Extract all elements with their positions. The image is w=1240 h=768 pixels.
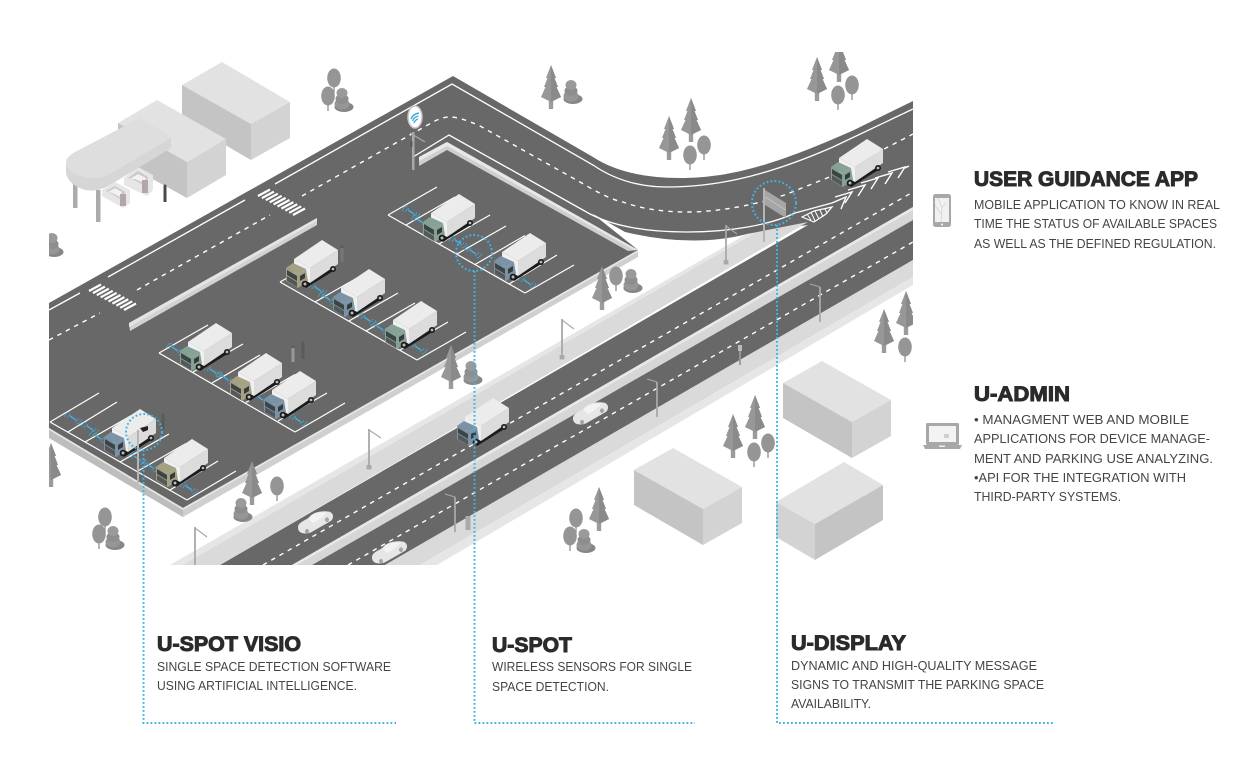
road markings [49, 84, 913, 565]
text block: User Guidance App: TIME THE STATUS OF AVAILABLE SPACES [974, 217, 1217, 231]
road chevrons [832, 167, 905, 209]
text block: U-Display: SIGNS TO TRANSMIT THE PARKING SPACE [791, 678, 1044, 692]
text block: U-Admin: • MANAGMENT WEB AND MOBILE [974, 413, 1189, 427]
canopy with pillars [66, 118, 171, 222]
crosswalk [89, 284, 136, 310]
text block: U-Display: DYNAMIC AND HIGH-QUALITY MESSAGE [791, 659, 1037, 673]
text block: U-Spot: SPACE DETECTION. [492, 680, 609, 694]
street lamps [195, 225, 820, 565]
dotted callout connector: U-Spot Visio [126, 414, 396, 723]
highway median [292, 207, 913, 565]
camera pole [137, 426, 148, 483]
dotted callout connector: U-Spot [456, 235, 695, 723]
text block: U-Spot Visio: U-SPOT VISIO [157, 633, 301, 656]
cars [298, 402, 608, 564]
text block: U-Spot Visio [157, 633, 391, 693]
text block: U-Spot: U-SPOT [492, 634, 572, 657]
text block: U-Admin: THIRD-PARTY SYSTEMS. [974, 490, 1121, 504]
building: lower middle [634, 448, 742, 545]
text block: User Guidance App: USER GUIDANCE APP [974, 168, 1198, 191]
parked and moving trucks [104, 139, 883, 487]
trees [41, 38, 916, 553]
parking bay lines [50, 187, 574, 500]
u-display sign on pole [763, 188, 786, 242]
central parking median [129, 218, 317, 331]
text block: U-Spot Visio: SINGLE SPACE DETECTION SOFTWARE [157, 660, 391, 674]
text block: U-Spot [492, 634, 692, 694]
sidewalk strip [170, 222, 808, 565]
dotted callout connector: U-Display [752, 181, 1055, 723]
sensors in parking bays [64, 206, 536, 494]
text block: User Guidance App [974, 168, 1220, 251]
text block: U-Display: AVAILABILITY. [791, 697, 871, 711]
building: lower right rear [783, 361, 891, 458]
person at gate [164, 184, 166, 202]
text block: User Guidance App: MOBILE APPLICATION TO KNOW IN REAL [974, 198, 1220, 212]
wifi gateway pole [408, 106, 425, 170]
lower sidewalk [385, 260, 913, 565]
isometric parking and road illustration [41, 38, 916, 565]
lower carriageway [312, 220, 913, 565]
building: rear block [182, 62, 290, 160]
road and parking asphalt [49, 76, 913, 565]
icon: smartphone [933, 194, 951, 227]
text block: U-Spot Visio: USING ARTIFICIAL INTELLIGENCE. [157, 679, 357, 693]
building: lower right front [776, 462, 883, 560]
hatched road island [795, 203, 832, 222]
crosswalk [258, 190, 305, 215]
pedestrians [162, 246, 344, 430]
text block: U-Admin [974, 383, 1213, 504]
entrance gates [102, 167, 153, 208]
text block: U-Display [791, 632, 1044, 711]
text block: U-Spot: WIRELESS SENSORS FOR SINGLE [492, 660, 692, 674]
text block: U-Admin: APPLICATIONS FOR DEVICE MANAGE- [974, 432, 1210, 446]
text block: U-Admin: •API FOR THE INTEGRATION WITH [974, 471, 1186, 485]
text block: U-Display: U-DISPLAY [791, 632, 906, 655]
icon: laptop [923, 423, 962, 449]
text block: U-Admin: U-ADMIN [974, 383, 1070, 406]
text block: U-Admin: MENT AND PARKING USE ANALYZING. [974, 452, 1213, 466]
building: entrance block [118, 100, 226, 198]
text block: User Guidance App: AS WELL AS THE DEFINED REGULATION. [974, 237, 1216, 251]
parking kerb wall [419, 142, 638, 251]
